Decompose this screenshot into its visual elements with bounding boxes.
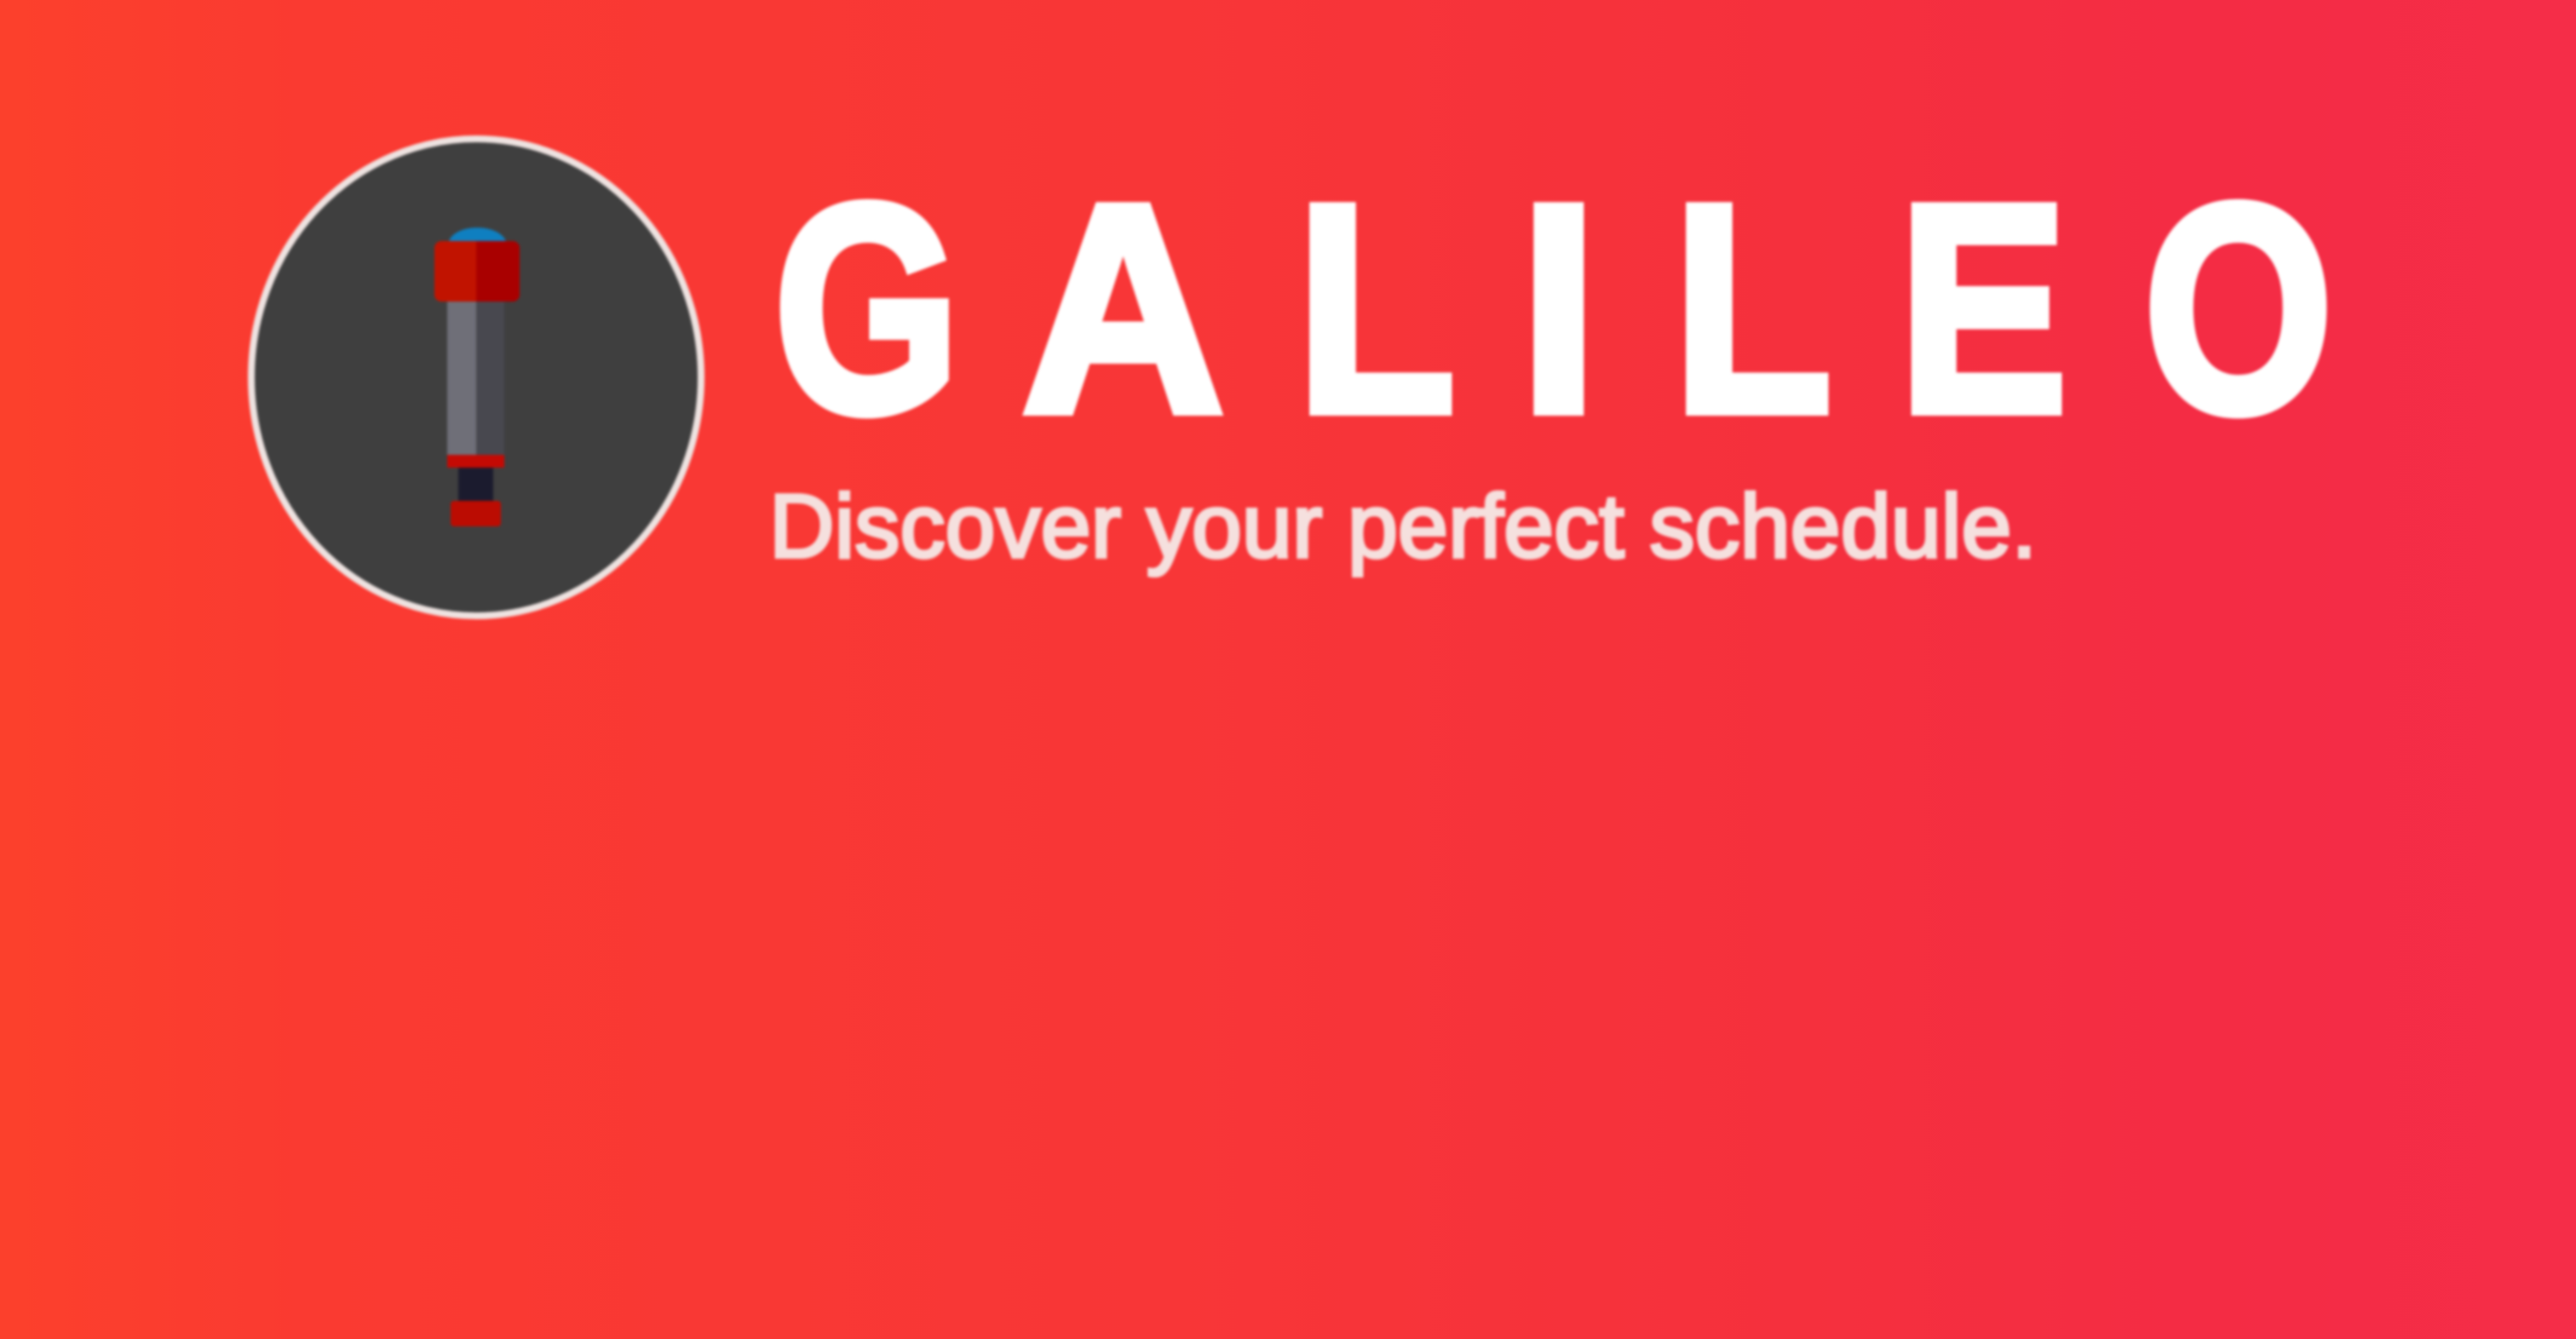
logo circle <box>251 139 701 616</box>
title <box>774 142 2332 474</box>
icon: telescope <box>434 227 520 526</box>
title: O <box>2144 144 2332 474</box>
title: L <box>1297 144 1456 474</box>
title: I <box>1520 143 1598 474</box>
title: A <box>1022 142 1224 474</box>
title: E <box>1899 144 2067 474</box>
tagline: Discover your perfect schedule. <box>769 476 2037 577</box>
title: L <box>1673 144 1832 474</box>
logo: telescope in circle <box>251 139 701 616</box>
title: G <box>774 143 959 474</box>
